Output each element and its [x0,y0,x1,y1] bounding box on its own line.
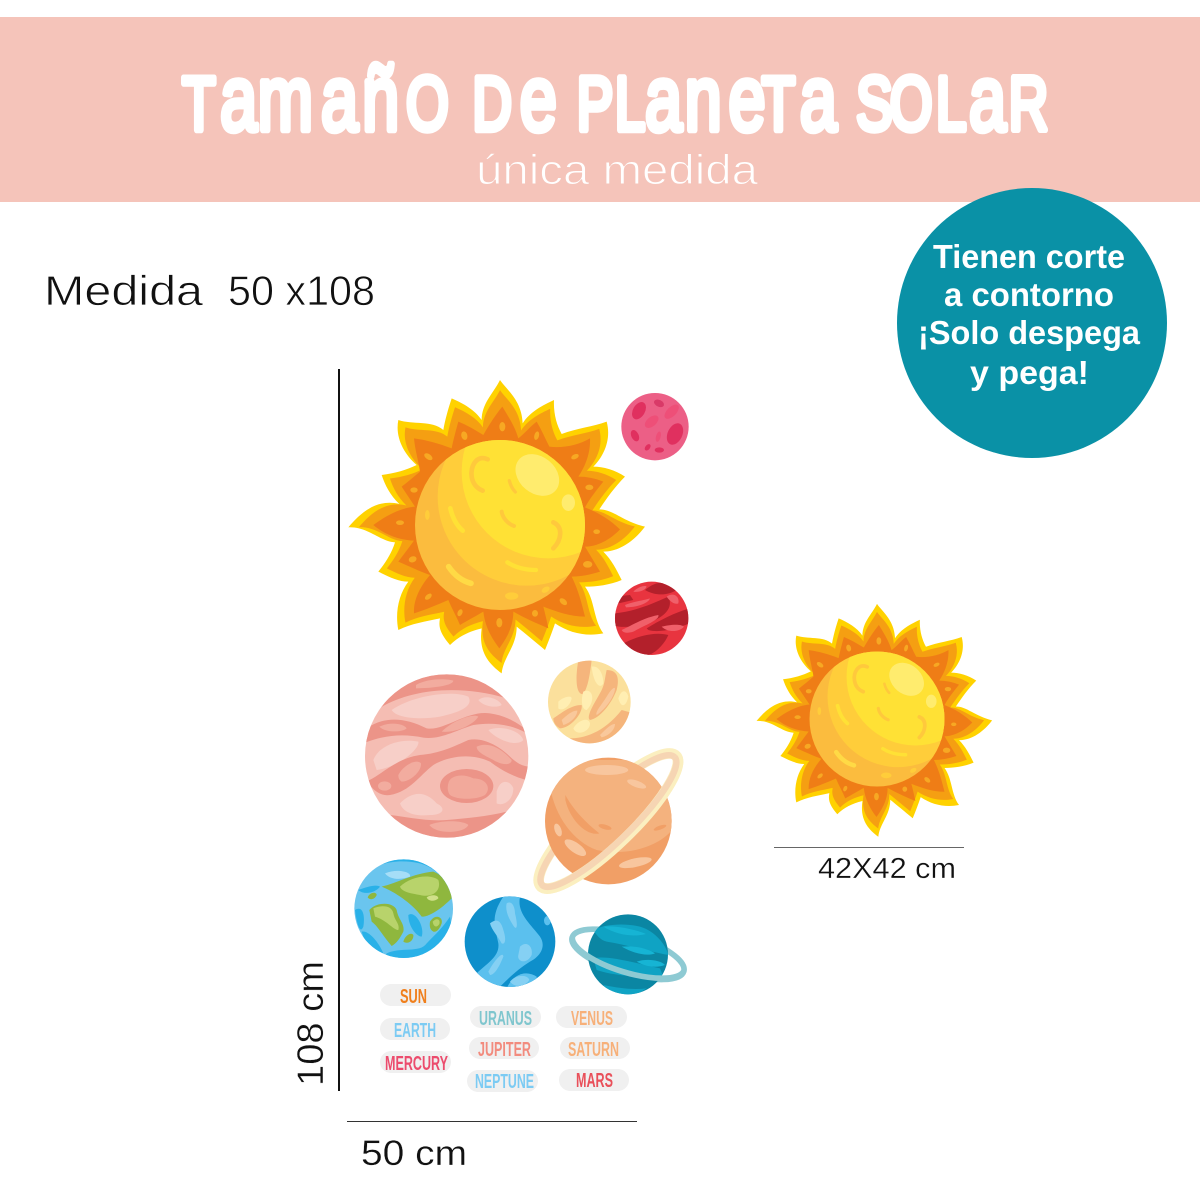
title: ane [645,46,765,150]
title: e [520,46,575,150]
title: amañ [220,46,399,150]
label: uranus: URANUS [479,1008,532,1030]
planet: mars [613,582,690,657]
planet: uranus [567,914,689,997]
label: neptune [467,1070,538,1093]
title: R [1009,62,1048,147]
label: mercury: MERCURY [385,1053,448,1075]
height label: 108 cm [290,961,331,1086]
label: earth: EARTH [394,1020,436,1042]
label: sun: SUN [400,986,427,1008]
callout text: a contorno [944,276,1114,313]
label: venus: VENUS [571,1008,613,1030]
callout text: y pega! [970,354,1089,391]
large sun [348,380,645,673]
label: sun [380,984,451,1008]
size label: 50 x108 [228,267,375,314]
label: uranus [470,1006,541,1030]
title: SOL [856,62,966,147]
label: saturn: SATURN [568,1039,619,1061]
planet: saturn [533,748,684,894]
subtitle: única medida [476,146,759,193]
title: a [800,46,855,150]
planet: earth [354,859,453,958]
label: saturn [560,1037,630,1061]
planet: venus [548,660,631,744]
size label [44,267,375,314]
planet: mercury [621,393,689,460]
label: mars [559,1069,629,1092]
size label: Medida [44,267,204,314]
label: neptune: NEPTUNE [475,1071,534,1093]
planet: jupiter [365,674,528,838]
label: mercury [380,1051,451,1075]
title: T [182,62,216,147]
title: a [969,46,1006,150]
callout badge [897,188,1167,458]
small sun size label: 42X42 cm [818,853,956,885]
callout text [918,238,1141,391]
label: jupiter [469,1037,539,1061]
header banner [0,17,1200,202]
callout text: ¡Solo despega [918,314,1141,351]
callout text: Tienen corte [933,238,1125,275]
planet: neptune [465,896,555,993]
label: mars: MARS [576,1070,613,1092]
label: earth [380,1018,450,1042]
title: D [472,62,512,147]
title: T [762,62,795,147]
width label: 50 cm [361,1134,467,1173]
label: venus [556,1006,627,1030]
small sun [757,604,992,837]
label: jupiter: JUPITER [478,1039,531,1061]
title: PL [577,62,645,147]
title: O [406,62,464,147]
